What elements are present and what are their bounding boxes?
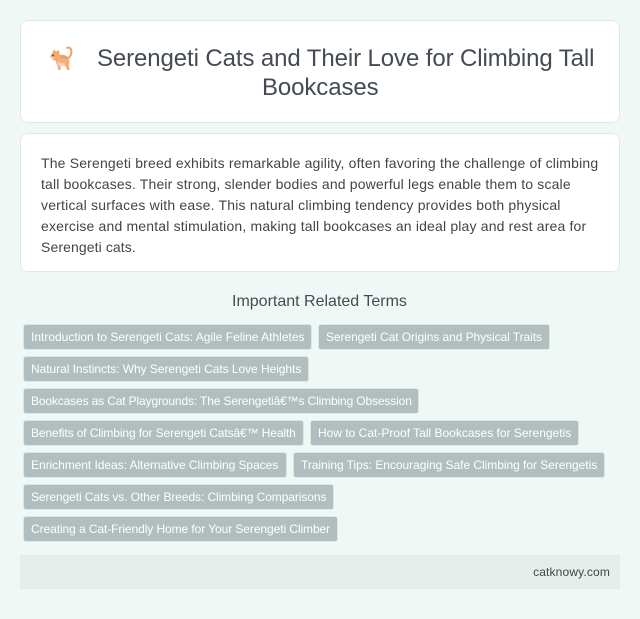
heading: important related terms: Important Related Terms	[232, 293, 407, 310]
title: Serengeti Cats and Their Love for Climbing Tall	[97, 45, 594, 72]
related terms chips: Training Tips: Encouraging Safe Climbing for Serengetis	[301, 458, 597, 472]
related terms chips: Serengeti Cat Origins and Physical Traits	[326, 330, 542, 344]
related terms chips: Natural Instincts: Why Serengeti Cats Love Heights	[31, 362, 301, 376]
related terms chips	[23, 324, 605, 542]
header panel	[20, 20, 620, 123]
icon: cat	[50, 46, 72, 70]
related terms chips: Benefits of Climbing for Serengeti Catsâ€™ Health	[31, 426, 296, 440]
title: Bookcases	[262, 74, 378, 101]
related terms chips: Bookcases as Cat Playgrounds: The Serengetiâ€™s Climbing Obsession	[31, 394, 412, 408]
description text: exercise and mental stimulation, making tall bookcases an ideal play and rest area for	[41, 218, 586, 234]
description text: tall bookcases. Their strong, slender bodies and powerful legs enable them to scale	[41, 176, 571, 192]
footer text: catknowy.com	[533, 565, 610, 579]
title	[97, 45, 594, 101]
description text: vertical surfaces with ease. This natural climbing tendency provides both physical	[41, 197, 561, 213]
related terms chips: Creating a Cat-Friendly Home for Your Serengeti Climber	[31, 522, 330, 536]
related terms chips: Enrichment Ideas: Alternative Climbing Spaces	[31, 458, 278, 472]
description text: Serengeti cats.	[41, 239, 136, 255]
footer bar	[20, 555, 620, 589]
description panel	[20, 133, 620, 272]
related terms chips: How to Cat-Proof Tall Bookcases for Serengetis	[318, 426, 571, 440]
description text: The Serengeti breed exhibits remarkable agility, often favoring the challenge of climbing	[41, 155, 598, 171]
related terms chips: Serengeti Cats vs. Other Breeds: Climbing Comparisons	[31, 490, 326, 504]
related terms chips: Introduction to Serengeti Cats: Agile Feline Athletes	[31, 330, 304, 344]
description text	[41, 155, 598, 255]
